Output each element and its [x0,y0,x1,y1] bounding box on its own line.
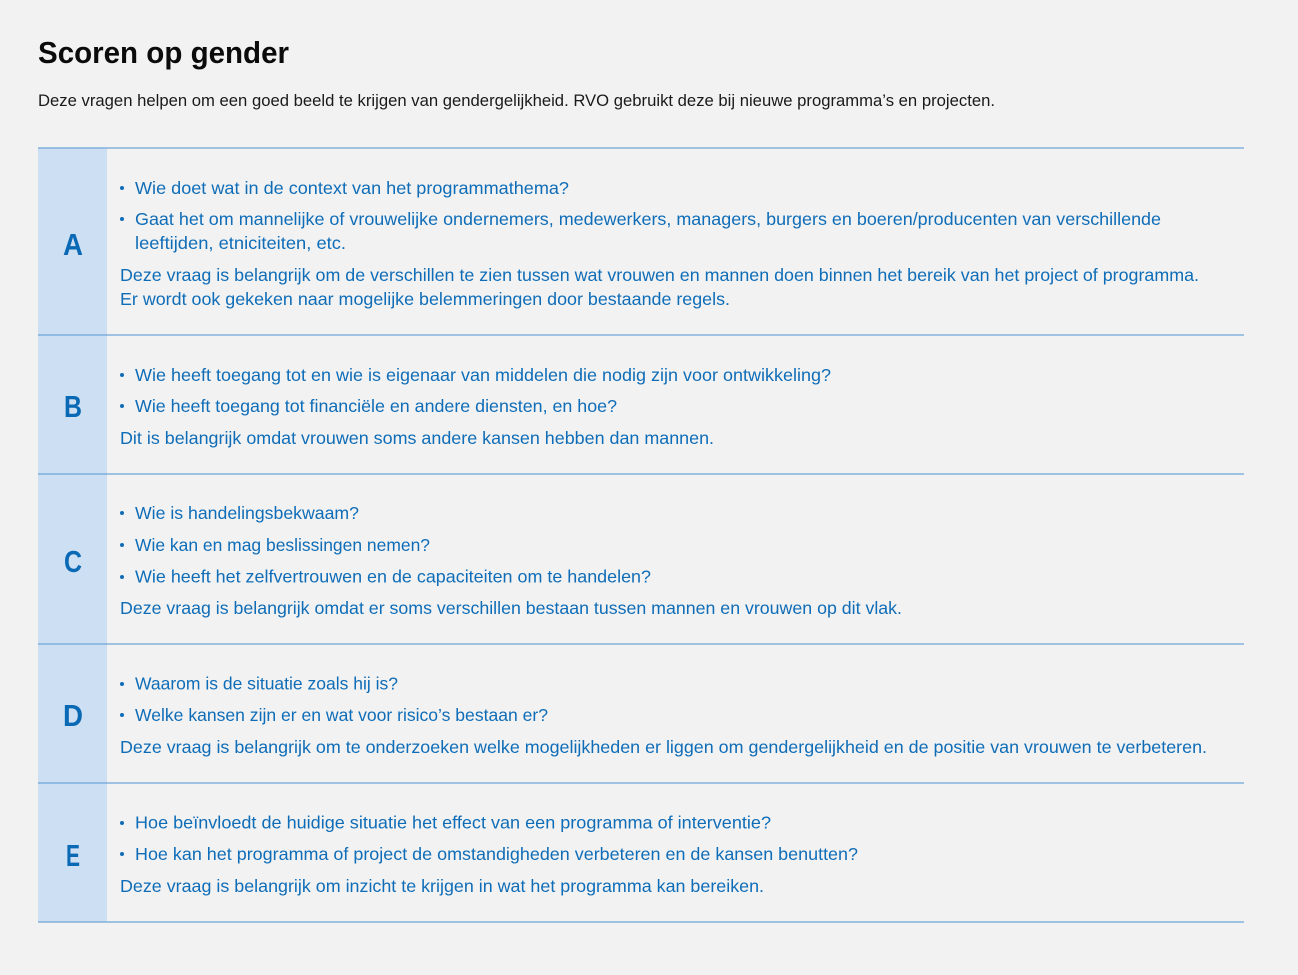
letter E: E [66,838,80,873]
bullet list B: Wie heeft toegang tot financiële en andere diensten, en hoe? [135,396,617,416]
bullet list E: Hoe kan het programma of project de omstandigheden verbeteren en de kansen benutten? [135,844,858,864]
letter B: B [64,389,82,424]
panel: question A [38,148,1244,335]
bullet list B: Wie heeft toegang tot en wie is eigenaar van middelen die nodig zijn voor ontwikkeling? [135,365,831,385]
letter C: C [64,544,82,579]
panel: question D [38,644,1244,783]
bullet list C [120,503,651,586]
explanation A: Er wordt ook gekeken naar mogelijke belemmeringen door bestaande regels. [120,289,730,309]
explanation E: Deze vraag is belangrijk om inzicht te krijgen in wat het programma kan bereiken. [120,876,764,896]
panel: question C [38,474,1244,644]
bullet list A: Gaat het om mannelijke of vrouwelijke ondernemers, medewerkers, managers, burgers en boeren/producenten van verschillende [135,209,1161,229]
bullet list E: Hoe beïnvloedt de huidige situatie het effect van een programma of interventie? [135,812,771,832]
letter D: D [63,698,83,733]
bullet list C: Wie kan en mag beslissingen nemen? [135,535,430,555]
explanation B: Dit is belangrijk omdat vrouwen soms andere kansen hebben dan mannen. [120,428,714,448]
bullet list C: Wie is handelingsbekwaam? [135,503,359,523]
explanation C: Deze vraag is belangrijk omdat er soms verschillen bestaan tussen mannen en vrouwen op dit vlak. [120,598,902,618]
bullet list E [120,812,858,864]
bullet list A: Wie doet wat in de context van het programmathema? [135,178,569,198]
letter A: A [63,227,83,262]
panel: question B [38,335,1244,474]
bullet list D: Waarom is de situatie zoals hij is? [135,674,398,694]
panel: question E [38,783,1244,922]
bullet list A [120,178,1161,253]
intro text: Deze vragen helpen om een goed beeld te krijgen van gendergelijkheid. RVO gebruikt deze bij nieuwe programma’s en projecten. [38,91,995,110]
bullet list A: leeftijden, etniciteiten, etc. [135,233,346,253]
explanation D: Deze vraag is belangrijk om te onderzoeken welke mogelijkheden er liggen om gendergelijkheid en de positie van vrouwen te verbeteren. [120,737,1207,757]
bullet list D [120,674,548,725]
bullet list B [120,365,831,416]
explanation A [120,265,1199,309]
bullet list C: Wie heeft het zelfvertrouwen en de capaciteiten om te handelen? [135,566,651,586]
explanation A: Deze vraag is belangrijk om de verschillen te zien tussen wat vrouwen en mannen doen binnen het bereik van het project of programma. [120,265,1199,285]
title: Scoren op gender [38,35,289,70]
bullet list D: Welke kansen zijn er en wat voor risico’s bestaan er? [135,705,548,725]
